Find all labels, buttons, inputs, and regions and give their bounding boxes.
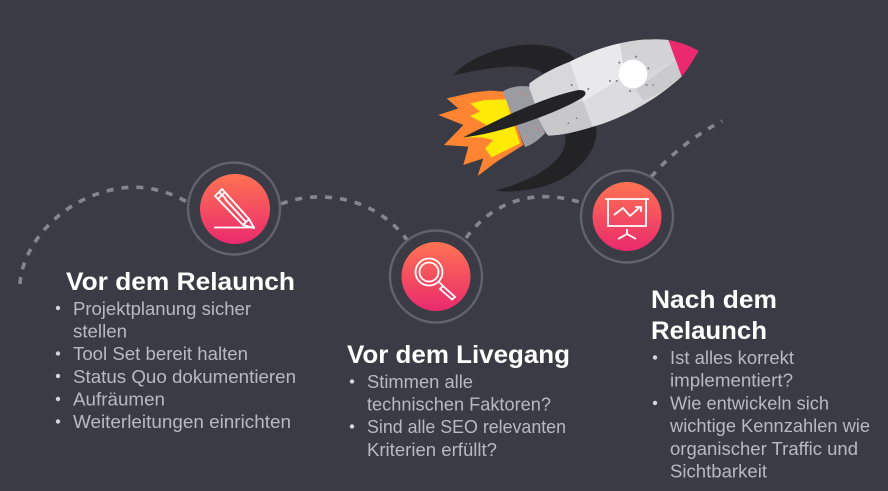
bullet list: Aufräumen (73, 388, 165, 410)
upper fin (453, 45, 575, 75)
bullet list: Tool Set bereit halten (73, 343, 248, 364)
bullet list: technischen Faktoren? (367, 394, 551, 414)
icon: pencil (214, 189, 255, 228)
heading: Vor dem Relaunch (66, 268, 295, 296)
text block: Vor dem Livegang (347, 341, 570, 460)
flame (438, 91, 523, 176)
bullet list: Status Quo dokumentieren (73, 366, 296, 387)
nose cone (668, 40, 698, 77)
bullet list: Sind alle SEO relevanten (367, 416, 566, 437)
icon: chart board (605, 199, 649, 239)
bullet list (653, 347, 870, 482)
bullet list: stellen (73, 320, 127, 342)
heading (651, 286, 777, 345)
centre fin (463, 90, 585, 137)
bullet list: Wie entwickeln sich (670, 392, 829, 414)
bullet list: Stimmen alle (367, 371, 473, 392)
step 2: magnifier (390, 230, 482, 322)
bullet list: Sichtbarkeit (670, 460, 767, 482)
bullet list: Ist alles korrekt (670, 347, 794, 368)
body (529, 39, 698, 136)
text block: Vor dem Relaunch (56, 268, 296, 432)
heading: Vor dem Livegang (347, 341, 570, 369)
window (619, 60, 647, 88)
bullet list: Weiterleitungen einrichten (73, 411, 291, 432)
engine neck (503, 86, 545, 147)
bullet list: organischer Traffic und (670, 438, 858, 459)
bullet list: implementiert? (670, 370, 793, 390)
rocket (438, 39, 698, 191)
bullet list: wichtige Kennzahlen wie (669, 415, 870, 436)
step 1: pencil (188, 162, 280, 254)
icon: magnifying glass (416, 258, 455, 300)
dashed flight path (20, 121, 722, 284)
bullet list: Kriterien erfüllt? (367, 439, 497, 460)
bullet list: Projektplanung sicher (73, 298, 251, 319)
bullet list (56, 298, 296, 432)
bullet list (350, 371, 566, 460)
text block: Nach dem Relaunch (651, 286, 870, 482)
lower fin (496, 125, 596, 191)
heading: Relaunch (651, 317, 767, 345)
heading: Nach dem (651, 286, 777, 314)
step 3: presentation chart (581, 170, 673, 262)
